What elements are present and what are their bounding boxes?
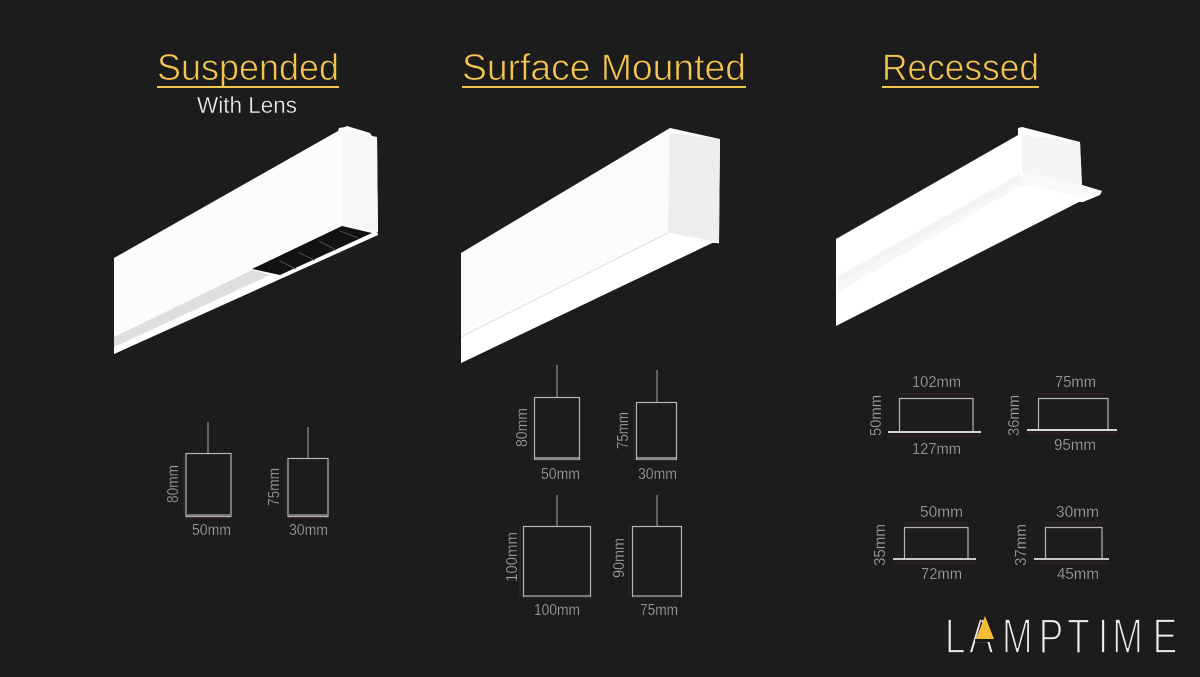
logo: LAMPTIME: LAMPTIME xyxy=(945,610,1177,664)
dimension drawing: 102mm by 127mm: 102mm xyxy=(912,374,961,391)
dimension drawing: 100mm by 100mm: 100mm xyxy=(504,532,521,582)
dimension drawing: 50mm by 72mm: 50mm xyxy=(920,504,963,521)
fixture: suspended with lens xyxy=(114,126,378,354)
dimension drawing: 90mm by 75mm: 90mm xyxy=(611,538,628,578)
dimension drawing: 90mm by 75mm xyxy=(611,495,682,619)
dimension drawing: 102mm by 127mm: 50mm xyxy=(868,395,885,436)
dimension drawing: 90mm by 75mm: 75mm xyxy=(640,602,678,619)
dimension drawing: 80mm by 50mm xyxy=(514,365,580,483)
dimension drawing: 75mm by 30mm: 75mm xyxy=(266,468,283,506)
dimension drawing: 102mm by 127mm: 127mm xyxy=(912,441,961,458)
dimension drawing: 100mm by 100mm: 100mm xyxy=(534,602,580,619)
dimension drawing: 75mm by 30mm: 30mm xyxy=(289,522,328,539)
dimension drawing: 80mm by 50mm: 50mm xyxy=(192,522,231,539)
dimension drawing: 75mm by 30mm: 75mm xyxy=(615,412,632,449)
subheading: With Lens: With Lens xyxy=(197,92,297,118)
dimension drawing: 102mm by 127mm xyxy=(868,374,981,458)
dimension drawing: 80mm by 50mm: 50mm xyxy=(541,466,580,483)
dimension drawing: 75mm by 30mm xyxy=(266,427,328,539)
dimension drawing: 30mm by 45mm: 30mm xyxy=(1056,504,1099,521)
heading: Suspended: Suspended xyxy=(157,47,339,88)
dimension drawing: 50mm by 72mm: 35mm xyxy=(872,524,889,566)
panel: suspended xyxy=(114,47,378,539)
dimension drawing: 100mm by 100mm xyxy=(504,495,590,619)
dimension drawing: 30mm by 45mm: 45mm xyxy=(1057,566,1099,583)
dimension drawing: 75mm by 95mm: 95mm xyxy=(1054,437,1096,454)
dimension drawing: 30mm by 45mm xyxy=(1013,504,1109,583)
dimension drawing: 75mm by 30mm xyxy=(615,370,677,483)
fixture: surface mounted xyxy=(461,128,720,363)
dimension drawing: 50mm by 72mm: 72mm xyxy=(921,566,962,583)
dimension drawing: 80mm by 50mm: 80mm xyxy=(165,465,182,503)
dimension drawing: 80mm by 50mm xyxy=(165,422,231,539)
fixture: recessed xyxy=(836,127,1102,326)
dimension drawing: 75mm by 30mm: 30mm xyxy=(638,466,677,483)
dimension drawing: 50mm by 72mm xyxy=(872,504,976,583)
heading: Surface Mounted: Surface Mounted xyxy=(462,47,746,88)
dimension drawing: 75mm by 95mm: 75mm xyxy=(1055,374,1096,391)
panel: recessed xyxy=(836,47,1117,583)
dimension drawing: 75mm by 95mm xyxy=(1006,374,1117,454)
dimension drawing: 30mm by 45mm: 37mm xyxy=(1013,524,1030,566)
panel: surface mounted xyxy=(461,47,746,619)
dimension drawing: 80mm by 50mm: 80mm xyxy=(514,408,531,447)
dimension drawing: 75mm by 95mm: 36mm xyxy=(1006,395,1023,436)
heading: Recessed: Recessed xyxy=(882,47,1039,88)
